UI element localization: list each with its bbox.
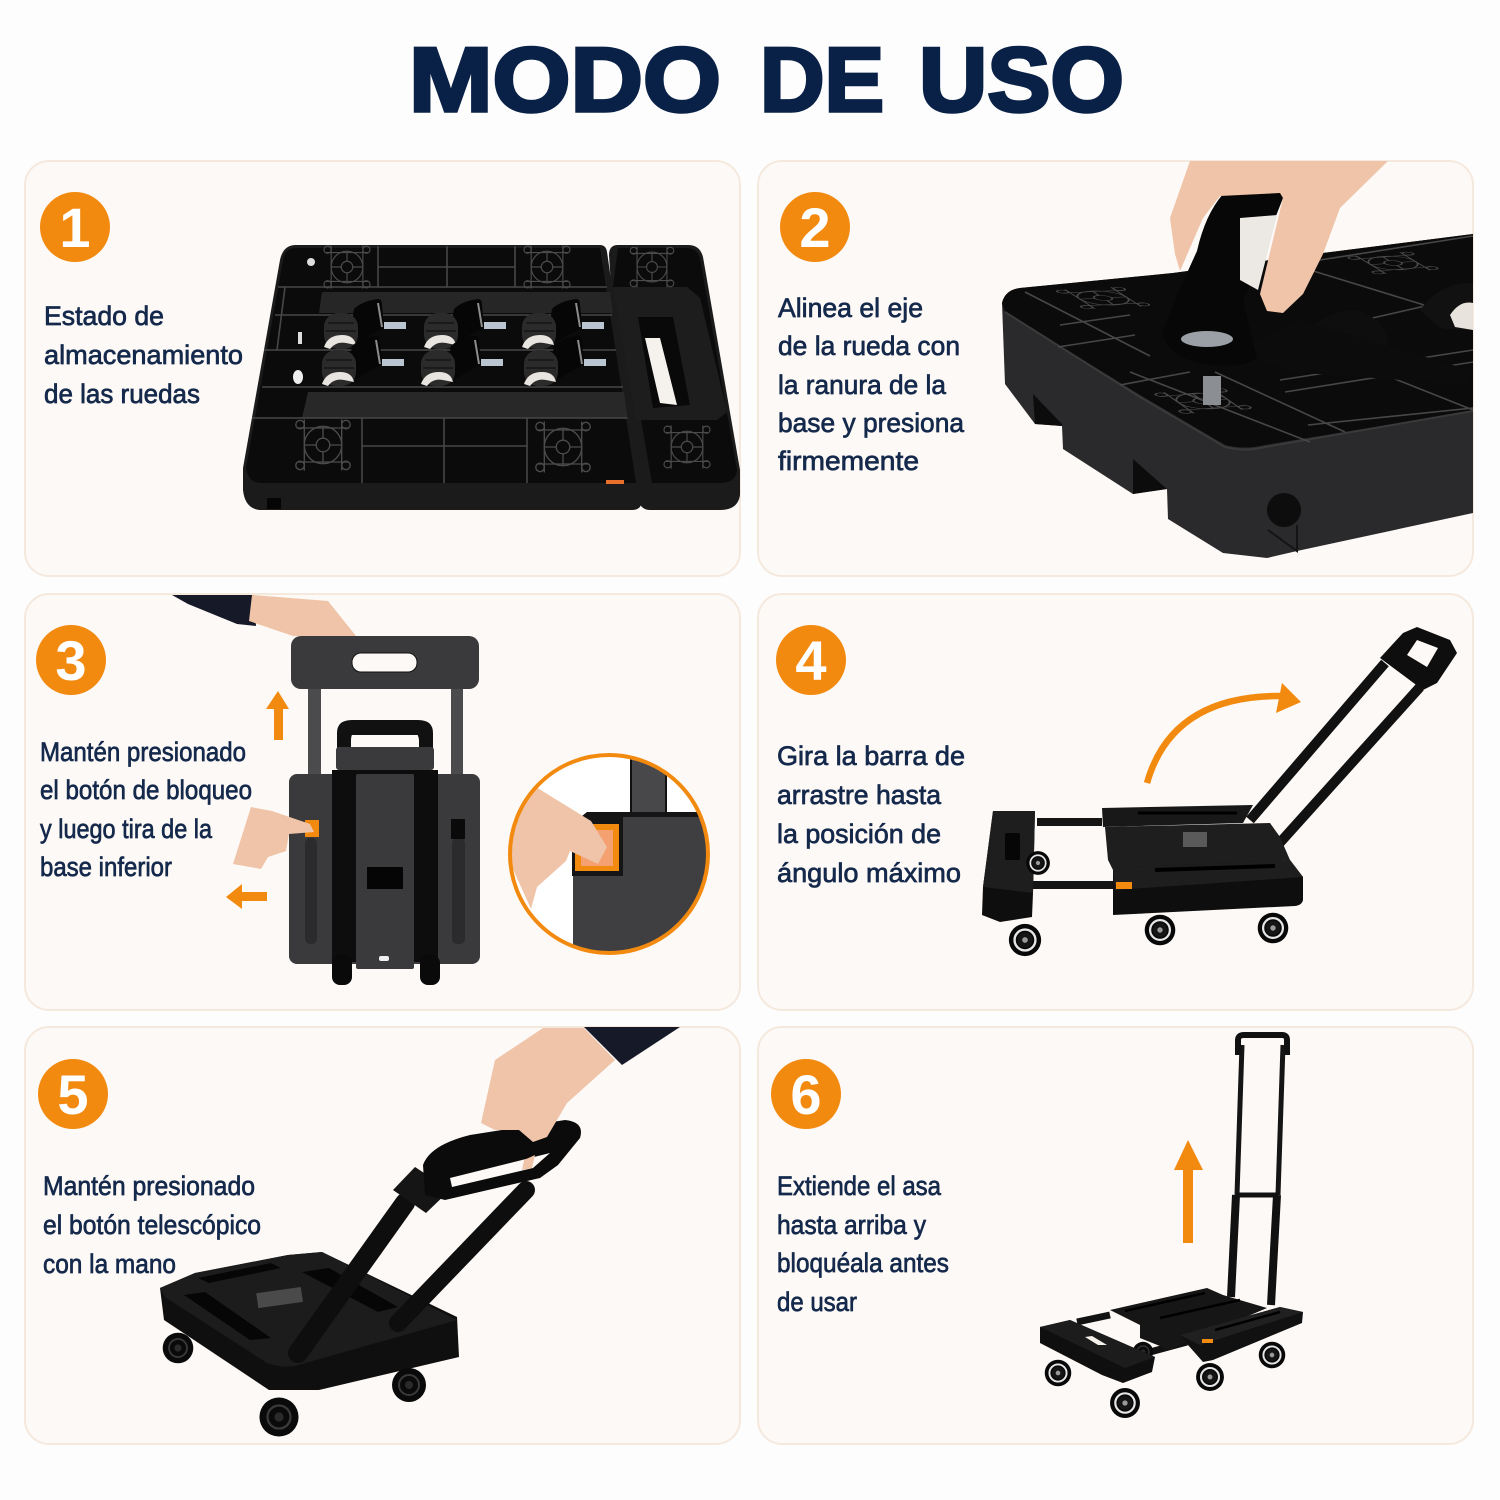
text 5: Mantén presionado [43,1171,255,1201]
panel 2 background [758,161,1473,576]
panel 6 background [758,1027,1473,1444]
badge 3 [36,625,106,695]
badge 2: 2 [799,196,831,259]
panel 3 background [25,594,740,1010]
text 2: base y presiona [778,408,965,438]
panel 4: rotate bar [758,594,1473,1010]
badge 5: 5 [57,1063,89,1126]
badge 1: 1 [59,196,91,259]
text 1: de las ruedas [44,379,200,409]
text 4 [777,741,965,888]
image: cart with extended handle [1040,1035,1303,1418]
text 3: y luego tira de la [40,814,213,844]
text 6: hasta arriba y [777,1210,926,1240]
text 1: almacenamiento [44,340,243,370]
arrow: up [266,691,289,740]
panel 6: extend handle [758,1027,1473,1444]
badge 5 [38,1059,108,1129]
badge 6: 6 [790,1063,822,1126]
badge 2 [780,192,850,262]
image: cart and hand on handle [160,1027,680,1437]
panel 2: align axle [758,161,1473,576]
panel 3: pull out lower base [25,594,740,1010]
text 4: ángulo máximo [777,858,961,888]
text 3 [40,737,252,882]
panel 1 background [25,161,740,576]
panel 4 background [758,594,1473,1010]
title: DE [760,30,884,131]
panel 5: telescopic button [25,1027,740,1444]
text 4: arrastre hasta [777,780,942,810]
text 4: la posición de [777,819,941,849]
text 6: bloquéala antes [777,1248,949,1278]
badge 1 [40,192,110,262]
text 6: de usar [777,1287,857,1317]
image: folded cart with hand [172,595,480,985]
text 3: base inferior [40,852,172,882]
badge 4: 4 [795,629,827,692]
text 2: Alinea el eje [778,293,923,323]
image: base tray with stored wheels [243,245,740,510]
image: cart with raised bar [982,627,1457,956]
image: hand fitting wheel into base [1002,161,1473,558]
text 5: el botón telescópico [43,1210,261,1240]
text 2: la ranura de la [778,370,947,400]
text 1 [44,301,243,409]
text 5 [43,1171,261,1279]
badge 3: 3 [55,629,87,692]
text 3: el botón de bloqueo [40,775,252,805]
title: MODO [409,30,721,131]
text 2: firmemente [778,446,919,476]
text 5: con la mano [43,1249,176,1279]
arrow: rotation arc [1147,683,1301,783]
text 3: Mantén presionado [40,737,246,767]
text 1: Estado de [44,301,164,331]
panel 1: storage [25,161,740,576]
panel 5 background [25,1027,740,1444]
text 2: de la rueda con [778,331,960,361]
text 6 [777,1171,949,1317]
inset: lock button close-up [505,755,710,960]
text 2 [778,293,965,476]
arrow: left [226,884,267,909]
title: USO [919,30,1124,131]
text 4: Gira la barra de [777,741,965,771]
arrow: up [1174,1140,1203,1243]
title [409,30,1124,131]
text 6: Extiende el asa [777,1171,942,1201]
badge 4 [776,625,846,695]
badge 6 [771,1059,841,1129]
